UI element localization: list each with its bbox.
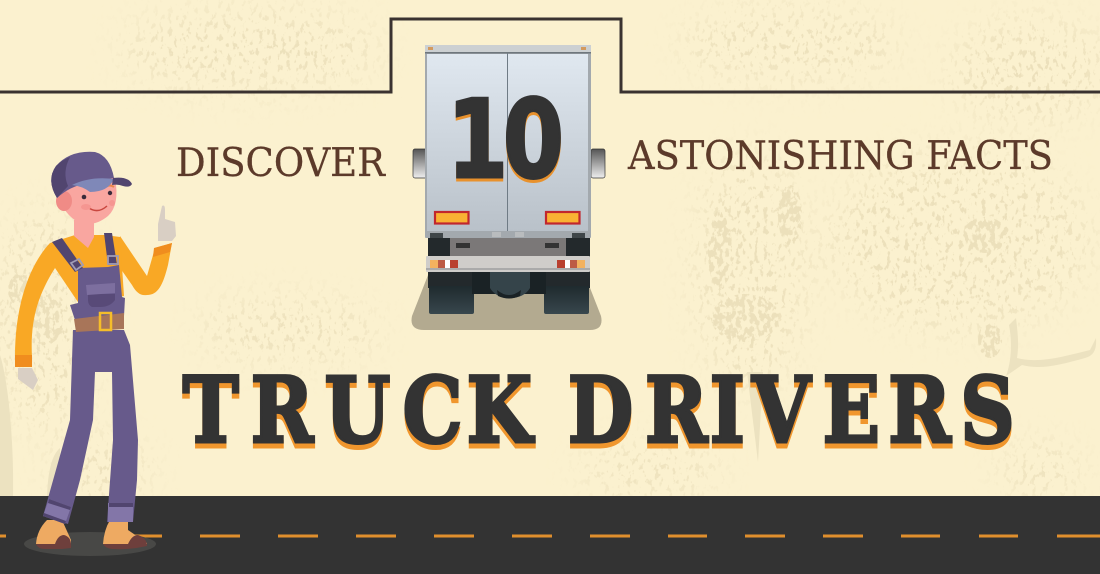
pocket xyxy=(88,294,115,307)
road dashes xyxy=(0,534,1100,538)
frame xyxy=(450,238,566,256)
texture blotches xyxy=(0,318,1096,496)
arm right xyxy=(118,236,172,295)
truck xyxy=(412,45,605,330)
title xyxy=(183,356,1015,469)
arm left xyxy=(15,243,55,357)
tail lights xyxy=(430,260,585,268)
overalls xyxy=(70,265,125,320)
dense texture patches xyxy=(8,185,1007,358)
face xyxy=(81,186,115,211)
text: astonishing facts: ASTONISHING FACTS xyxy=(627,134,1053,179)
mirrors xyxy=(413,149,605,178)
lights xyxy=(435,212,580,224)
shirt xyxy=(50,235,124,305)
box latches xyxy=(430,233,585,238)
head xyxy=(58,169,116,224)
hand left xyxy=(18,368,38,390)
title face: TRUCK DRIVERS xyxy=(183,356,1015,464)
cap xyxy=(51,152,132,198)
shoes xyxy=(36,520,147,549)
belt buckle xyxy=(100,313,111,330)
number 10: 10 xyxy=(447,78,564,203)
truck shadow xyxy=(412,270,602,330)
ground shadow xyxy=(24,532,156,556)
strap buckles xyxy=(71,256,118,270)
bumper xyxy=(426,256,590,272)
road xyxy=(0,496,1100,574)
doors xyxy=(427,54,588,231)
wheels and mudflaps xyxy=(428,238,590,314)
legs xyxy=(43,330,138,524)
belt xyxy=(74,313,124,332)
straps xyxy=(52,233,117,272)
number 10: 10 xyxy=(447,81,564,206)
text: discover: DISCOVER xyxy=(176,141,387,186)
neck xyxy=(74,220,94,248)
title shadow: TRUCK DRIVERS xyxy=(183,361,1015,469)
hand right xyxy=(158,206,176,241)
door marks xyxy=(428,47,433,50)
box xyxy=(425,45,591,238)
header line xyxy=(0,19,1100,92)
worker xyxy=(15,152,176,556)
trouser cuffs xyxy=(43,499,133,524)
